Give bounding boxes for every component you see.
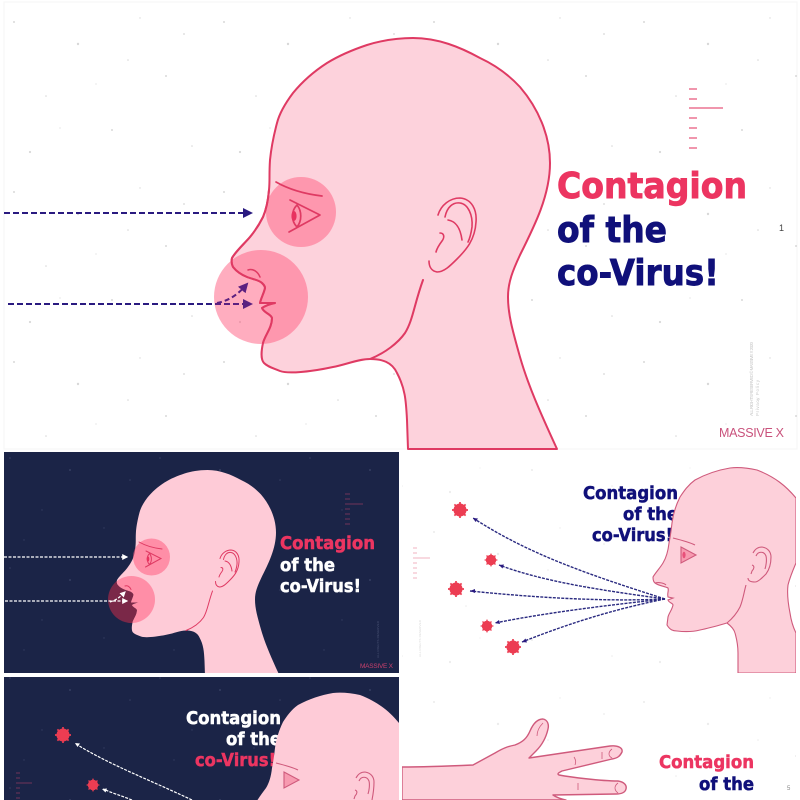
credit dark: ALL RIGHTS RESERVED xyxy=(376,620,380,658)
title xyxy=(557,166,747,294)
head dark sneeze xyxy=(258,693,399,800)
viruses dark xyxy=(55,727,99,791)
title dark sneeze xyxy=(186,710,280,766)
brand: MASSIVE X xyxy=(719,426,785,440)
arrow to mouth xyxy=(8,303,213,305)
vertical credit xyxy=(748,342,760,416)
title dark: Contagion xyxy=(280,533,375,554)
panel: dark slide xyxy=(4,452,399,676)
mouth highlight circle xyxy=(214,250,308,344)
page number hand: 5 xyxy=(787,786,791,792)
brand dark: MASSIVE X xyxy=(360,663,394,670)
arrow to nose xyxy=(217,284,247,303)
arrows dark sneeze xyxy=(76,744,192,800)
title dark: co-Virus! xyxy=(280,576,361,597)
arrow to eye xyxy=(4,212,251,214)
ruler sneeze xyxy=(413,548,430,578)
head profile xyxy=(232,38,557,449)
eye highlight circle xyxy=(266,177,336,247)
arrow to mouth inside circle xyxy=(215,303,251,305)
panel: dark sneeze slide xyxy=(4,677,399,800)
title dark sneeze: co-Virus! xyxy=(195,750,276,771)
head profile dark xyxy=(108,470,280,676)
title: Contagion xyxy=(557,166,747,207)
hand xyxy=(402,719,626,800)
ruler mark xyxy=(689,89,723,148)
title hand: Contagion xyxy=(659,752,754,773)
title sneeze: of the xyxy=(623,504,678,525)
sneeze arrows xyxy=(470,518,665,642)
title: co-Virus! xyxy=(557,253,719,294)
title dark xyxy=(280,535,374,592)
viruses xyxy=(448,502,521,655)
arrowheads dark xyxy=(75,743,107,792)
title dark: of the xyxy=(280,555,335,576)
page number: 1 xyxy=(779,223,784,233)
title hand: of the xyxy=(699,774,754,795)
arrows dark xyxy=(4,557,127,602)
title: of the xyxy=(557,210,667,251)
panel: hand slide xyxy=(402,698,796,800)
ruler dark sneeze xyxy=(16,773,32,798)
vertical credit: ALL RIGHTS RESERVED © MASSIVE X 2020 xyxy=(748,342,754,416)
title sneeze: Contagion xyxy=(583,483,678,504)
title sneeze xyxy=(584,485,677,542)
title dark sneeze: Contagion xyxy=(186,708,281,729)
panel: main slide xyxy=(4,2,797,449)
credit sneeze: ALL RIGHTS RESERVED xyxy=(418,619,422,657)
panel: sneeze slide xyxy=(402,452,796,673)
redrawn face line over mouth circle xyxy=(232,182,322,343)
head facing left xyxy=(653,468,796,673)
ruler dark xyxy=(345,494,363,524)
title hand xyxy=(660,754,754,790)
title sneeze: co-Virus! xyxy=(592,525,673,546)
vertical credit: Privacy Policy xyxy=(755,379,760,416)
arrowheads xyxy=(470,518,527,642)
title dark sneeze: of the xyxy=(226,729,281,750)
